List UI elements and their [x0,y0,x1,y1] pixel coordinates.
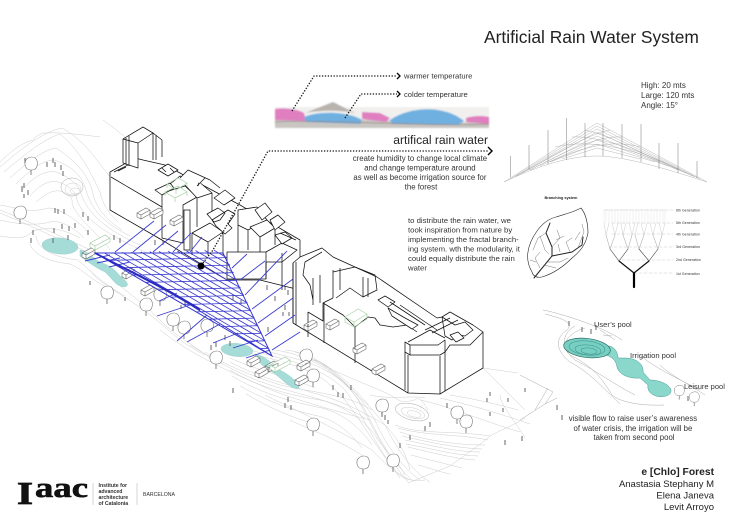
annotation: warmer temperature: warmer temperature [403,72,472,80]
logo: IAAC: architecture [98,495,128,501]
building block: north mass [110,127,300,290]
text block: fractal branching: could equally distribute the rain [408,254,515,263]
pool diagram [520,310,705,420]
project credits [619,467,715,513]
logo: IAAC: advanced [98,489,122,495]
text block: rain water purpose: create humidity to change local climate [353,154,487,163]
rain structure support columns [85,221,300,358]
label: user's pool: User’s pool [594,320,632,329]
rain structure lattice canopy [95,250,272,356]
logo: IAAC: of Catalonia [98,501,128,507]
site plan: axonometric forest site with buildings and rain structure [0,120,562,483]
contour lines [0,120,530,483]
generation labels: 4th Generation [676,232,700,236]
generation labels: 1st Generation [676,272,700,276]
huts on building faces [137,208,385,375]
text block: canopy dimensions: Large: 120 mts [641,91,694,100]
text block: canopy dimensions: High: 20 mts [641,81,686,90]
trees and people on site [14,157,562,474]
title: Artificial Rain Water System [484,27,699,47]
logo: IAAC: I [17,475,33,511]
heading: artificial rain water: artifical rain water [393,133,488,147]
project credits: e [Chlo] Forest [641,467,715,478]
annotation: warmer temperature [292,72,472,111]
text block: fractal branching: implementing the fractal branch- [408,235,519,244]
logo: IAAC: BARCELONA [143,492,176,498]
generation labels: 5th Generation [676,221,700,225]
building block: south mass [293,248,483,394]
text block: water awareness: taken from second pool [593,433,675,442]
logo: IAAC: aac [35,473,88,504]
text block: fractal branching: ing system. wth the modularity, it [408,244,521,254]
leader from canopy to rain water note [198,147,492,270]
label: branching system: Branching system [544,196,578,200]
annotation: colder temperature [345,90,468,118]
text block: rain water purpose: as well as become irrigation source for [353,173,487,182]
project credits: Anastasia Stephany M [619,479,714,490]
icon: leaf veins [528,208,588,278]
text block: fractal branching: water [407,264,427,272]
section image: warm and cold temperature [275,102,489,128]
green roof volumes [165,178,367,327]
generation labels: 2nd Generation [676,258,701,262]
generation labels: 6th Generation [676,208,700,212]
generation labels: 3rd Generation [676,245,700,249]
text block: rain water purpose: and change temperature around [364,164,476,172]
generation labels [676,208,701,276]
logo: IAAC: Institute for [98,483,127,489]
annotation: colder temperature: colder temperature [404,90,468,99]
text block: rain water purpose: the forest [405,182,438,192]
text block: canopy dimensions: Angle: 15° [641,101,678,110]
canopy elevation drawing [504,118,707,182]
text block: fractal branching: took inspiration from nature by [408,226,512,234]
label: irrigation pool: Irrigation pool [630,351,676,360]
project credits: Elena Janeva [656,490,715,502]
text block: water awareness: of water crisis, the irrigation will be [574,424,692,433]
label: leisure pool: Leisure pool [684,382,725,391]
text block: water awareness: visible flow to raise user’s awareness [569,414,697,423]
logo: IAAC [17,473,176,511]
text block: fractal branching: to distribute the rain water, we [408,216,511,225]
pool site contours [520,310,705,420]
ponds [41,236,299,389]
branching tree diagram [604,210,673,287]
project credits: Levit Arroyo [664,502,714,513]
user's, irrigation and leisure pools [604,346,671,397]
